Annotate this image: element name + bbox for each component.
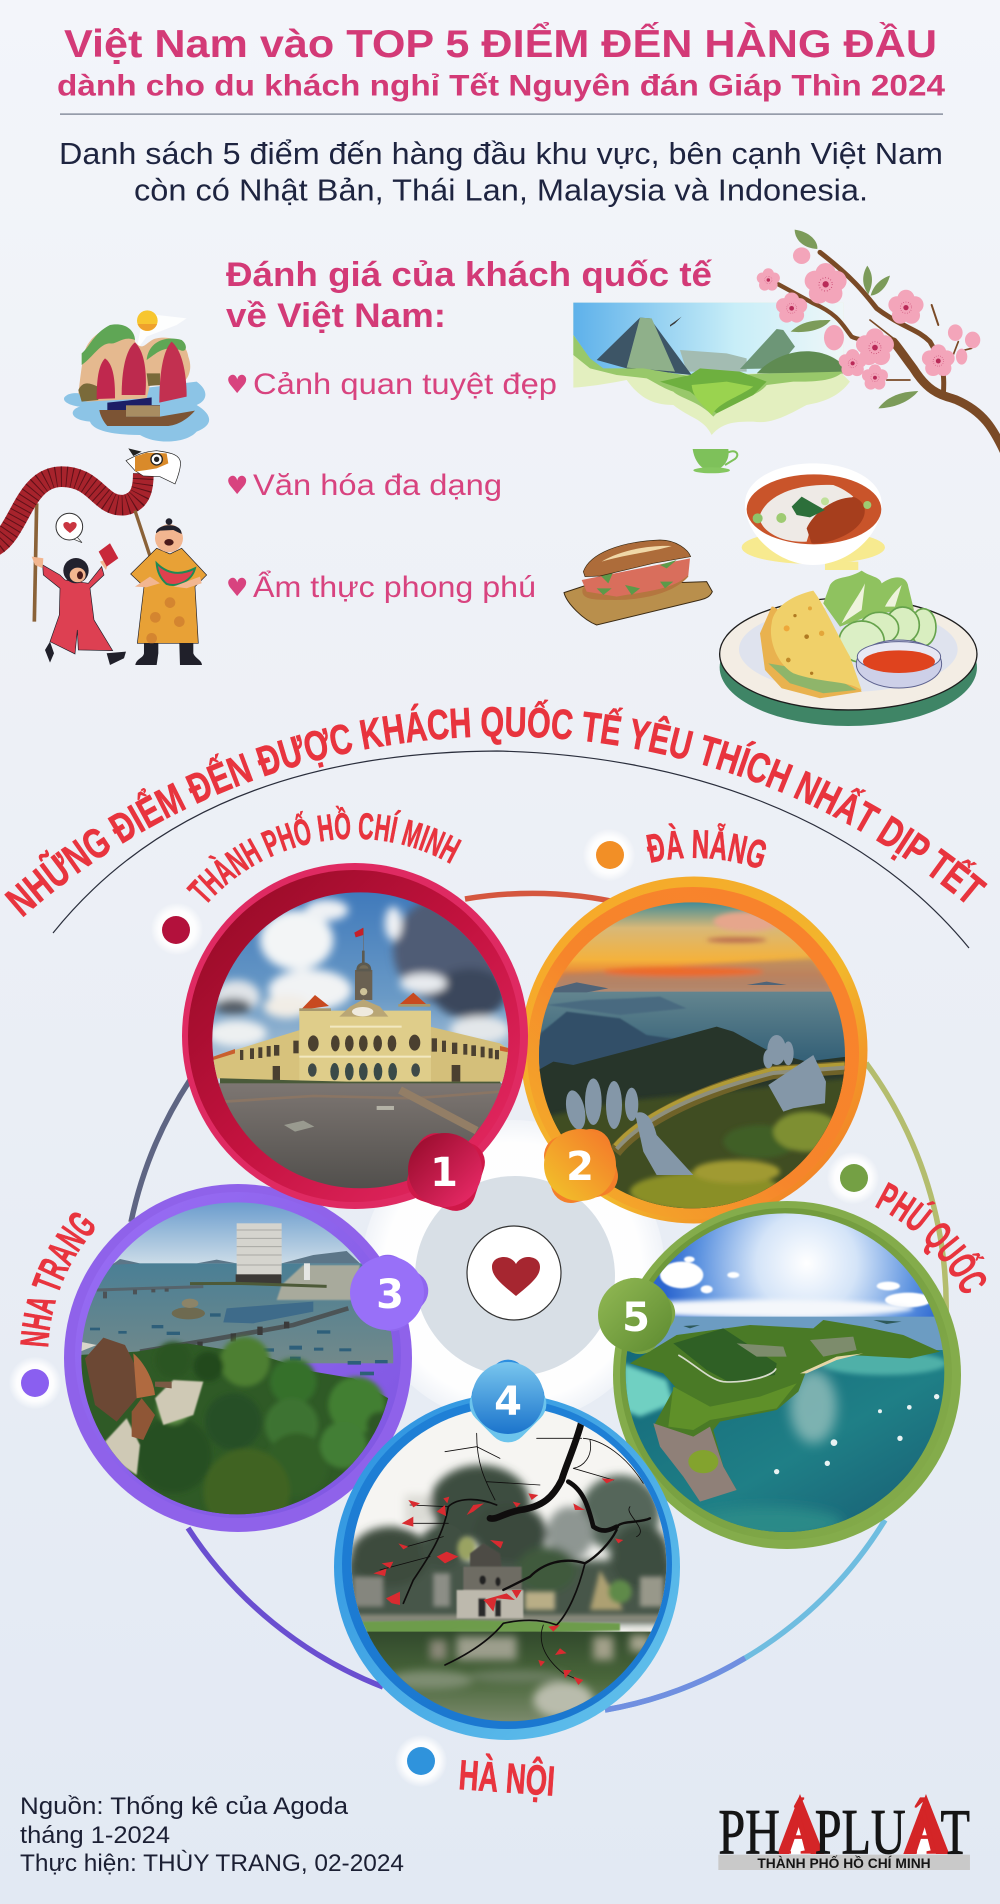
heading: reviews: về Việt Nam: bbox=[226, 297, 446, 335]
badge 2: 2 bbox=[566, 1144, 594, 1190]
source credit bbox=[20, 1793, 404, 1877]
photo: Phu Quoc bbox=[607, 1210, 947, 1540]
badge 5 bbox=[591, 1270, 683, 1362]
icon: dragon dance and two characters bbox=[0, 448, 207, 665]
label: Hanoi: HÀ NỘI bbox=[457, 1750, 556, 1805]
intro text bbox=[59, 136, 943, 208]
badge 1: 1 bbox=[430, 1150, 458, 1196]
icon: banh mi bbox=[564, 540, 712, 625]
photo: City Hall bbox=[207, 890, 513, 1190]
label: Phu Quoc: PHÚ QUỐC bbox=[875, 1182, 986, 1294]
bullet list: ♥ bbox=[226, 370, 248, 399]
dot: Ho Chi Minh City bbox=[151, 903, 203, 955]
icon: noodle bowl bbox=[742, 463, 885, 570]
panel: Nha Trang circle bbox=[64, 1184, 412, 1535]
tree branches bbox=[380, 1422, 650, 1680]
source credit: Nguồn: Thống kê của Agoda bbox=[20, 1793, 349, 1820]
bullet list: Ẩm thực phong phú bbox=[253, 570, 536, 604]
arc heading: NHỮNG ĐIỂM ĐẾN ĐƯỢC KHÁCH QUỐC TẾ YÊU THÍCH NHẤT DỊP TẾT bbox=[4, 700, 988, 918]
panel: Phu Quoc circle bbox=[607, 1201, 961, 1549]
bullet list: Văn hóa đa dạng bbox=[253, 469, 502, 502]
photo: Golden Bridge bbox=[537, 902, 847, 1212]
bullet list: ♥ bbox=[226, 573, 248, 602]
label: Ho Chi Minh City: THÀNH PHỐ HỒ CHÍ MINH bbox=[186, 806, 462, 903]
photo: Nha Trang bay bbox=[80, 1202, 397, 1535]
icon: heart bbox=[467, 1226, 561, 1320]
title: Việt Nam vào TOP 5 ĐIỂM ĐẾN HÀNG ĐẦU bbox=[64, 21, 937, 66]
bullet list bbox=[226, 368, 557, 604]
icon: banh xeo plate bbox=[720, 571, 977, 726]
intro text: còn có Nhật Bản, Thái Lan, Malaysia và Indonesia. bbox=[134, 172, 868, 208]
panel: Ho Chi Minh City circle bbox=[182, 863, 528, 1209]
badge 4 bbox=[461, 1352, 555, 1451]
connecting ring arcs bbox=[131, 893, 946, 1710]
heading: reviews: Đánh giá của khách quốc tế bbox=[226, 256, 712, 294]
center disc bbox=[361, 1120, 665, 1424]
source credit: tháng 1-2024 bbox=[20, 1822, 170, 1849]
dot: Phu Quoc bbox=[827, 1152, 879, 1204]
bullet list: Cảnh quan tuyệt đẹp bbox=[253, 368, 557, 401]
panel: Hanoi circle bbox=[334, 1394, 680, 1740]
title: dành cho du khách nghỉ Tết Nguyên đán Giáp Thìn 2024 bbox=[57, 70, 945, 102]
badge 3: 3 bbox=[376, 1272, 404, 1318]
dot: Hanoi bbox=[395, 1735, 447, 1787]
icon: Ha Long bay boat bbox=[64, 310, 209, 442]
logo: Phap Luat: THÀNH PHỐ HỒ CHÍ MINH bbox=[757, 1854, 931, 1871]
icon: landscape with tea cup bbox=[573, 303, 850, 473]
bullet list: ♥ bbox=[226, 471, 248, 500]
source credit: Thực hiện: THÙY TRANG, 02-2024 bbox=[20, 1850, 404, 1877]
title bbox=[57, 21, 945, 115]
badge 4: 4 bbox=[494, 1379, 522, 1425]
intro text: Danh sách 5 điểm đến hàng đầu khu vực, bên cạnh Việt Nam bbox=[59, 136, 943, 171]
panel: Da Nang circle bbox=[520, 876, 868, 1224]
photo: Hoan Kiem Lake bbox=[347, 1403, 673, 1725]
badge 3 bbox=[344, 1247, 436, 1339]
label: Da Nang: ĐÀ NẴNG bbox=[646, 823, 766, 868]
dot: Da Nang bbox=[583, 829, 635, 881]
logo: Phap Luat: PHÁPLUẬT bbox=[718, 1796, 970, 1868]
badge 2 bbox=[540, 1125, 622, 1207]
dot: Nha Trang bbox=[9, 1357, 61, 1409]
badge 1 bbox=[402, 1128, 490, 1216]
badge 5: 5 bbox=[622, 1295, 650, 1341]
label: Nha Trang: NHA TRANG bbox=[20, 1212, 94, 1347]
icon: blossom branch bbox=[757, 230, 1000, 453]
heading: reviews bbox=[226, 256, 712, 335]
